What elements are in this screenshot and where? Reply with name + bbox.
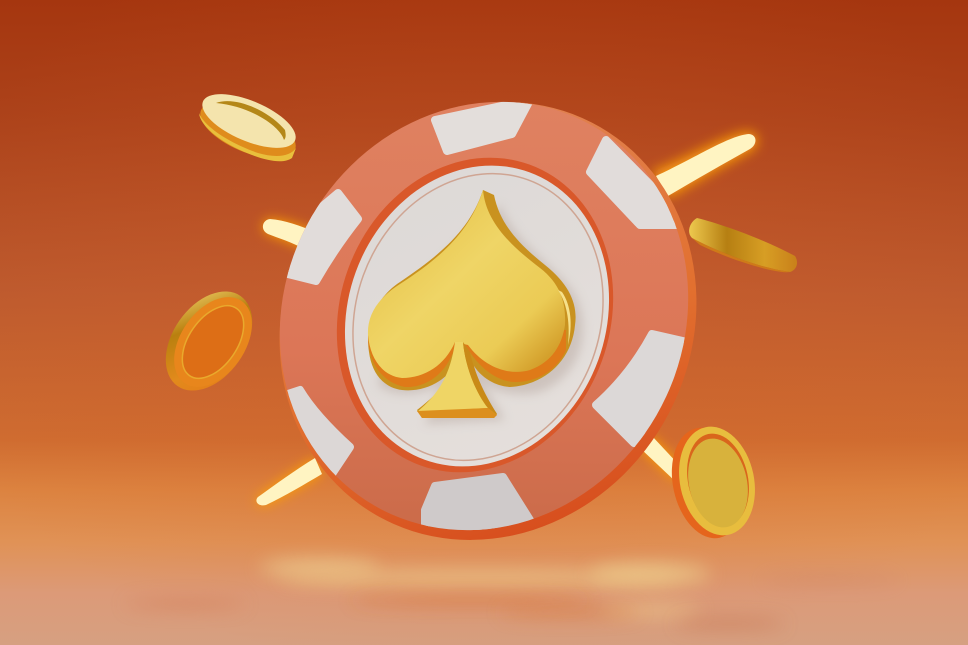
coin edge xyxy=(192,90,304,170)
chip inner groove xyxy=(293,118,657,512)
light streak: upper left xyxy=(263,219,316,250)
chip face outline xyxy=(313,138,643,496)
coin face xyxy=(158,283,268,401)
coin face xyxy=(195,83,303,159)
light streak: upper right xyxy=(652,132,757,198)
coin rim xyxy=(148,275,270,407)
spade stem base xyxy=(417,408,497,418)
spade right highlight xyxy=(558,290,571,345)
poker chip xyxy=(280,102,696,540)
spade front face xyxy=(368,190,565,378)
chip body xyxy=(200,26,776,616)
spade stem xyxy=(417,342,488,412)
chip white segments xyxy=(286,102,685,530)
spade drop shadow xyxy=(378,205,583,424)
coin: left xyxy=(148,275,270,407)
coin: top left xyxy=(192,83,304,170)
coin: upper right xyxy=(689,218,797,272)
coin edge xyxy=(662,421,754,545)
coin rim xyxy=(669,420,765,542)
spade back edge xyxy=(368,190,576,418)
chip centre face xyxy=(303,128,651,504)
coin: lower right xyxy=(662,420,765,545)
floor reflections xyxy=(125,558,900,628)
coin groove xyxy=(216,101,286,140)
coin face xyxy=(680,433,756,533)
light streak: lower left xyxy=(256,458,322,505)
chip face ring xyxy=(202,27,766,605)
light streak: lower right xyxy=(640,436,680,482)
spade orange lip xyxy=(368,330,566,387)
spade stem side xyxy=(463,342,497,414)
